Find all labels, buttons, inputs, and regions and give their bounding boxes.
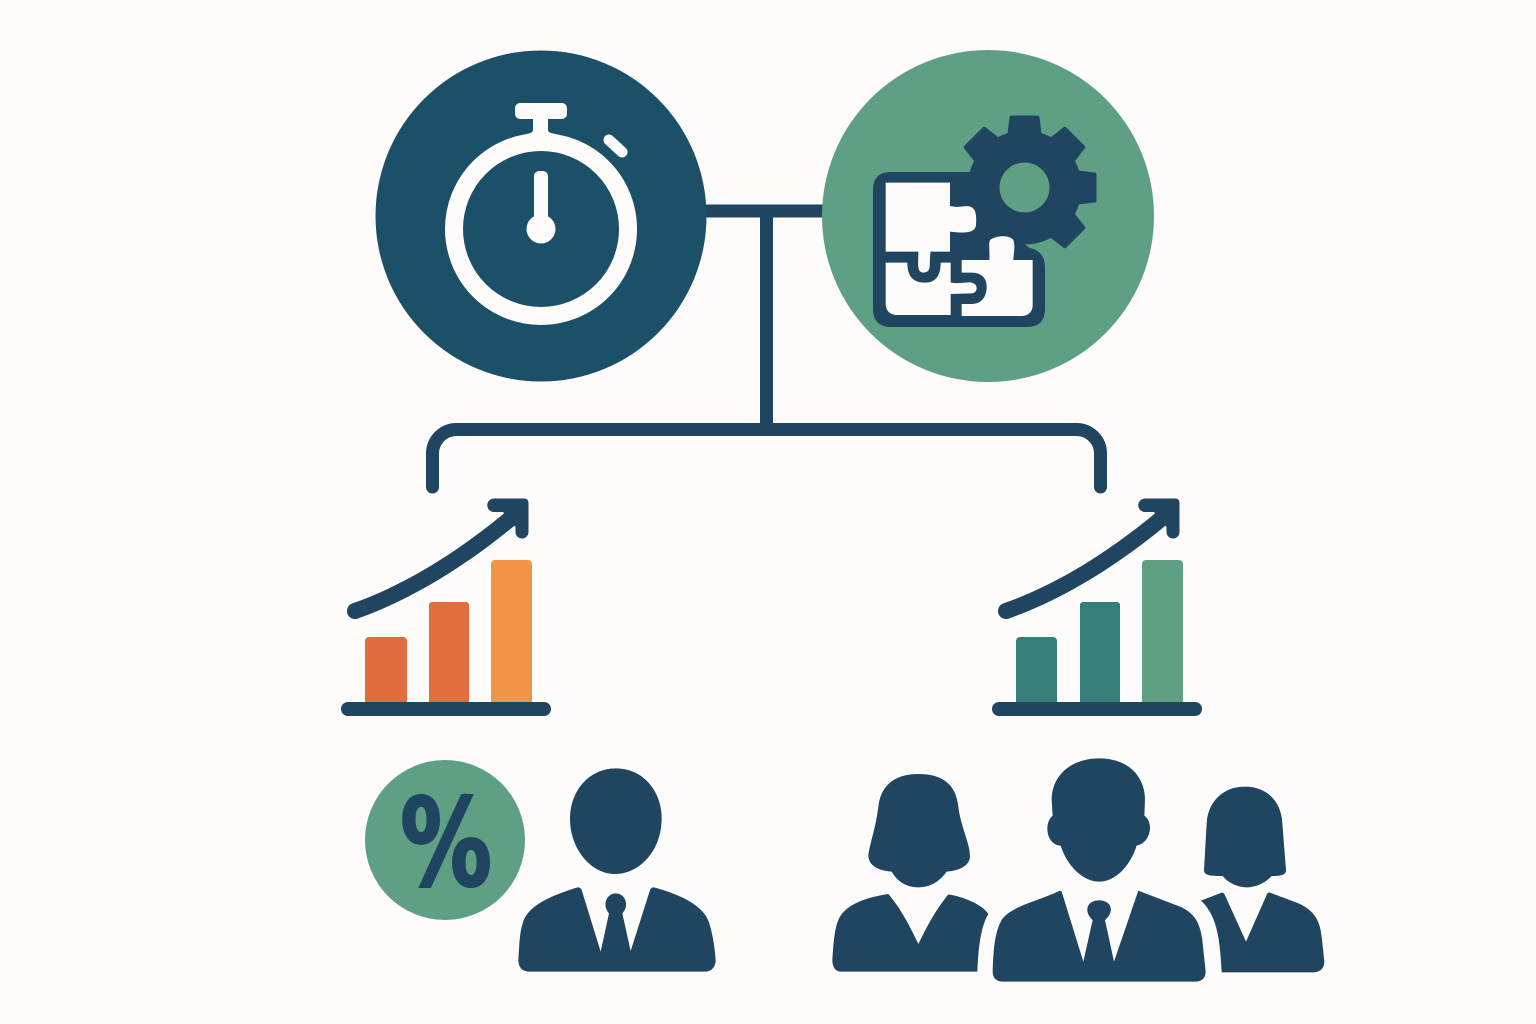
icon: puzzle frame and gear [873,116,1096,327]
panel: stopwatch circle [376,50,706,382]
icon: team of three [832,758,1324,982]
panel: puzzle and gear circle [822,50,1154,382]
icon: stopwatch [454,103,628,316]
connector: circles to bracket [432,211,1100,487]
bar chart: left orange [341,498,551,716]
icon: puzzle pieces [886,183,1033,316]
icon: single businessperson [518,768,716,972]
arrow: right growth [998,498,1180,619]
arrow: left growth [347,498,528,619]
person: centre man [993,758,1206,982]
person: left woman [832,774,988,972]
icon: percent badge [365,760,525,920]
bar chart: right green [992,498,1202,716]
person: right woman [1201,787,1324,972]
percent sign: % [400,775,492,914]
